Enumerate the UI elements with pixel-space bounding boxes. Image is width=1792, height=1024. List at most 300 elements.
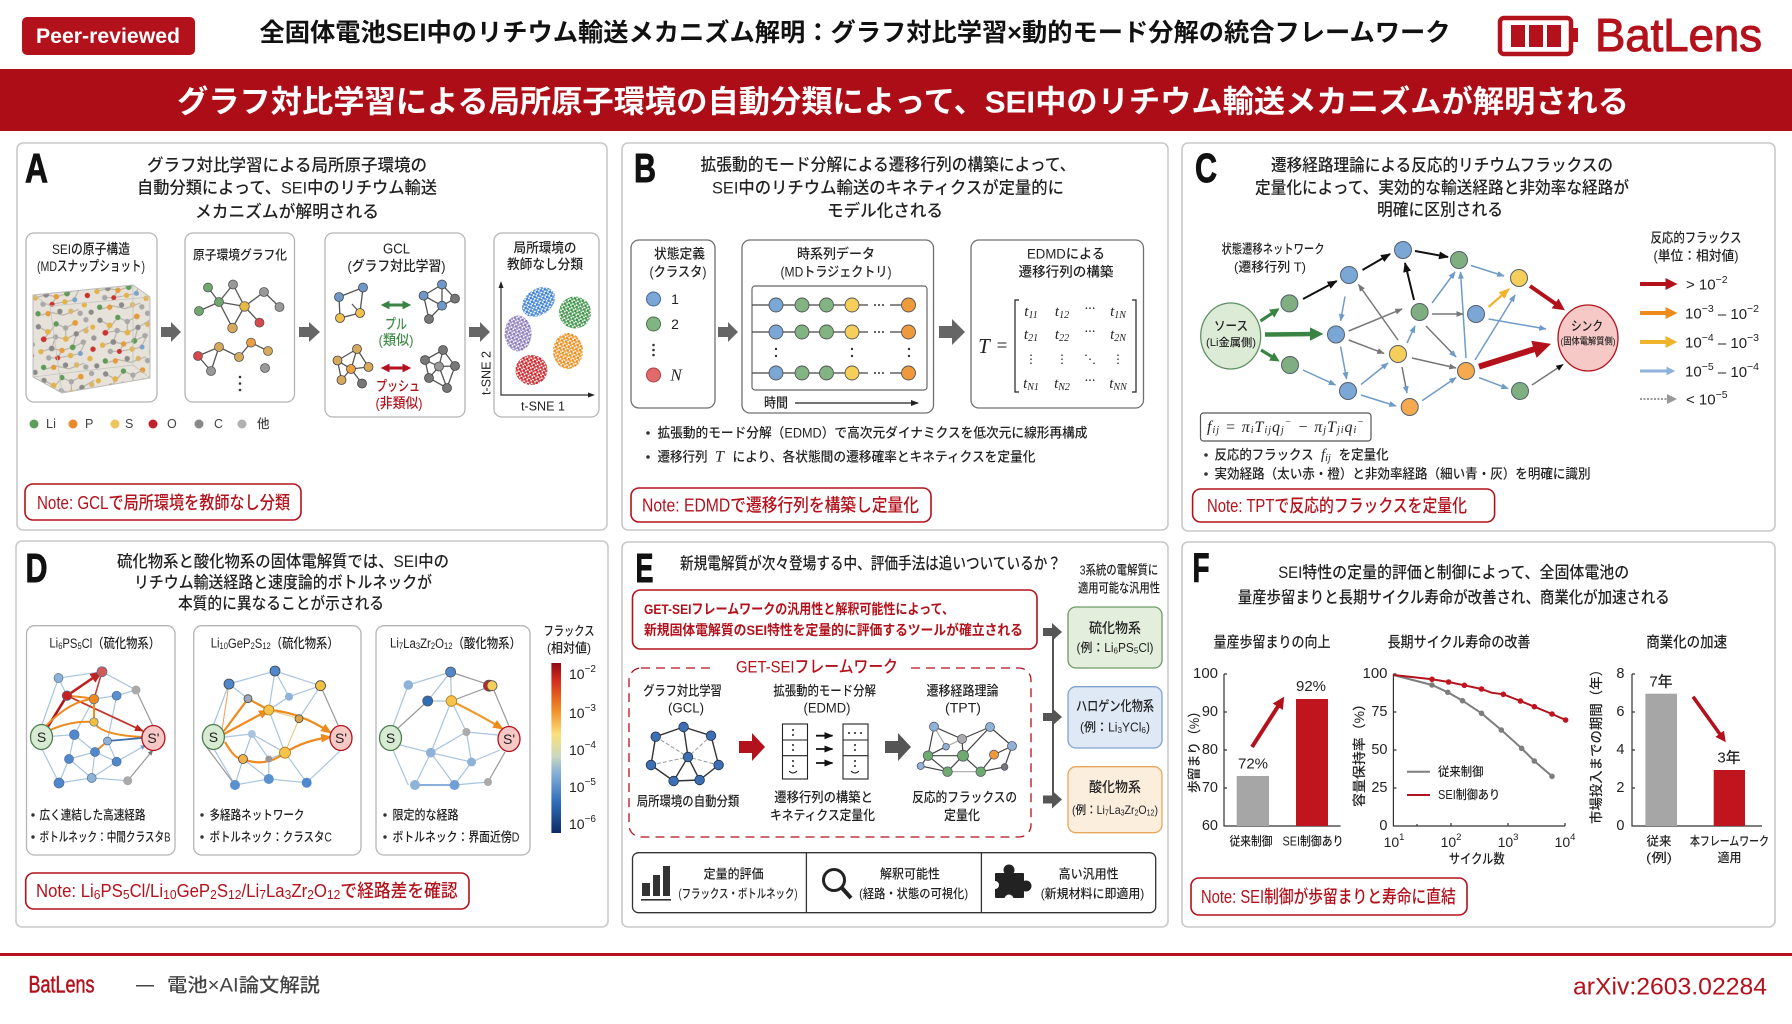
- box: transition matrix: ⋯: [1084, 303, 1096, 315]
- chart: cycle life: 10: [1498, 834, 1513, 850]
- legend: atoms: Li: [46, 417, 56, 431]
- card: Li10GeP2S12: GeP: [228, 636, 251, 650]
- card: Li7La3Zr2O12: Li: [390, 636, 401, 650]
- note B: [631, 488, 931, 522]
- formula: −: [1357, 416, 1364, 428]
- panel E: [622, 542, 1168, 927]
- bullets B: 遷移行列: [658, 448, 708, 464]
- note D: GeP: [177, 881, 210, 901]
- card: sulfide: 硫化物系: [1089, 620, 1141, 636]
- heading B: 拡張動的モード分解による遷移行列の構築によって、: [700, 156, 1076, 174]
- title: 全固体電池SEI中のリチウム輸送メカニズム解明：グラフ対比学習×動的モード分解の統合フレームワーク: [260, 18, 1450, 47]
- step: TPT: 反応的フラックスの: [912, 790, 1017, 805]
- box: time series: 時間: [764, 396, 788, 410]
- footer rule: [0, 953, 1792, 956]
- chart: cycle life: 長期サイクル寿命の改善: [1388, 633, 1530, 651]
- note A: [25, 484, 301, 520]
- legend: flux: [1640, 230, 1759, 408]
- card: Li6PS5Cl: ボトルネック：中間クラスタB: [40, 830, 170, 844]
- legend: flux: 反応的フラックス: [1650, 230, 1742, 246]
- panel F: [1182, 542, 1775, 927]
- chart: commercialization: 3年: [1717, 750, 1741, 766]
- icon: magnifier: [824, 870, 851, 898]
- step: EDMD: キネティクス定量化: [770, 808, 875, 823]
- formula: −: [1285, 416, 1291, 428]
- card: Li7La3Zr2O12: 2: [431, 641, 435, 651]
- badge: Peer-reviewed: Peer-reviewed: [36, 25, 180, 48]
- card: Li6PS5Cl: 6: [58, 641, 62, 651]
- note D: 3: [285, 886, 291, 902]
- formula: − π: [1292, 418, 1323, 436]
- card: Li7La3Zr2O12: Zr: [420, 636, 431, 650]
- legend: flux: 10: [1685, 334, 1702, 352]
- chart: yield: SEI制御あり: [1282, 834, 1344, 849]
- card: Li7La3Zr2O12: 12: [444, 641, 452, 651]
- t-SNE 2 axis label: t-SNE 2: [478, 351, 494, 395]
- chart: commercialization: 7年: [1649, 674, 1673, 690]
- note C: [1193, 489, 1495, 522]
- chart: cycle life: 10: [1441, 834, 1456, 850]
- framework: GET-SEI: GET-SEIフレームワーク: [736, 658, 898, 676]
- legend: flux: −3: [1702, 303, 1714, 315]
- card: Li10GeP2S12: 多経路ネットワーク: [210, 808, 304, 822]
- formula: q: [1272, 418, 1280, 436]
- logo: BatLens: [1500, 9, 1762, 61]
- legend: atoms: C: [214, 417, 223, 431]
- legend: flux: > 10: [1686, 276, 1716, 294]
- panel A: [17, 143, 607, 530]
- connector arrows: [1043, 623, 1062, 808]
- chart: yield: 70: [1202, 780, 1218, 796]
- box: transition matrix: =: [997, 336, 1007, 356]
- card: halide: ): [1146, 721, 1150, 735]
- card: Li10GeP2S12: 2: [251, 641, 255, 651]
- heading D: リチウム輸送経路と速度論的ボトルネックが: [134, 572, 432, 592]
- panel letter E: E: [636, 545, 654, 591]
- heading A: グラフ対比学習による局所原子環境の: [147, 156, 427, 175]
- chart: cycle life: 容量保持率（%）: [1351, 697, 1367, 807]
- chart: commercialization: 本フレームワーク: [1690, 835, 1769, 849]
- box: transition matrix: N2: [1057, 382, 1070, 392]
- heading C: [1255, 156, 1629, 220]
- chart: cycle life: 従来制御: [1438, 764, 1484, 779]
- note D: Note: Li: [36, 881, 98, 901]
- card: Li7La3Zr2O12: [376, 626, 530, 855]
- chart: commercialization: 8: [1616, 666, 1624, 682]
- panel letter B: B: [634, 145, 656, 191]
- card: Li10GeP2S12: [194, 626, 361, 855]
- card: oxide: 2: [1134, 808, 1139, 817]
- box: transition matrix: 2N: [1114, 332, 1127, 344]
- chart: yield: 80: [1202, 742, 1218, 758]
- card: oxide: 酸化物系: [1089, 779, 1141, 795]
- feature: interpretability: (経路・状態の可視化): [859, 886, 968, 901]
- card: sulfide: 5: [1134, 646, 1139, 656]
- chart: yield: 100: [1193, 666, 1218, 682]
- card: sulfide: PS: [1118, 641, 1134, 655]
- card: sulfide: [1068, 607, 1162, 668]
- chart: yield: 72%: [1238, 756, 1268, 772]
- bullets C: 反応的フラックス: [1214, 448, 1314, 462]
- chart: commercialization: 4: [1616, 742, 1624, 758]
- heading A: [137, 156, 437, 222]
- box: state definition: N: [669, 366, 683, 384]
- chart: commercialization: 6: [1616, 704, 1624, 720]
- box: GCL: [325, 233, 465, 417]
- heading D: [117, 552, 449, 613]
- arrow gray: [885, 733, 911, 761]
- bullets C: [1204, 447, 1590, 482]
- box: transition matrix: ⋱: [1084, 352, 1096, 366]
- bullets B: [646, 424, 1088, 466]
- applicability label: [1078, 562, 1160, 596]
- network label: 状態遷移ネットワーク: [1222, 242, 1324, 256]
- colorbar: flux: −6: [585, 814, 596, 824]
- chart: yield: [1187, 634, 1344, 849]
- colorbar: flux: (相対値): [547, 640, 591, 656]
- chart: yield: 90: [1202, 704, 1218, 720]
- arrow: [161, 322, 181, 342]
- heading C: 定量化によって、実効的な輸送経路と非効率な経路が: [1255, 178, 1629, 198]
- card: oxide: O: [1138, 803, 1147, 817]
- box: transition matrix: 12: [1059, 310, 1069, 320]
- arrow: [469, 322, 490, 342]
- note B: Note: EDMDで遷移行列を構築し定量化: [642, 496, 919, 516]
- box: state definition: (クラスタ): [650, 264, 706, 280]
- box: time series: [742, 240, 934, 413]
- feature: quantitative: [678, 866, 798, 901]
- colorbar: flux: フラックス: [544, 624, 594, 638]
- heading D: 本質的に異なることが示される: [178, 593, 384, 613]
- feature: interpretability: 解釈可能性: [880, 866, 940, 882]
- card: Li10GeP2S12: 10: [220, 641, 228, 651]
- box: transition matrix: ⋮: [1025, 352, 1037, 366]
- logo: BatLens: BatLens: [1595, 9, 1762, 61]
- box: atomic structure: [26, 233, 157, 402]
- formula: ji: [1335, 424, 1344, 436]
- note D: /Li: [242, 881, 259, 901]
- card: Li6PS5Cl: [26, 626, 175, 855]
- card: Li7La3Zr2O12: （酸化物系）: [452, 636, 521, 650]
- box: transition matrix: t: [1024, 304, 1028, 320]
- legend: atoms: 他: [257, 417, 270, 431]
- heading E: 新規電解質が次々登場する中、評価手法は追いついているか？: [680, 553, 1061, 573]
- legend: flux: – 10: [1714, 364, 1747, 380]
- legend: flux: – 10: [1714, 334, 1747, 352]
- colorbar: flux: 10: [569, 779, 585, 795]
- legend: flux: −2: [1747, 303, 1759, 315]
- card: Li7La3Zr2O12: O: [435, 636, 444, 650]
- box: transition matrix: t: [1110, 327, 1114, 343]
- bullets C: を定量化: [1339, 448, 1389, 462]
- legend: flux: 10: [1685, 364, 1702, 380]
- footer brand: BatLens: [28, 972, 94, 998]
- note D: Zr: [291, 881, 307, 901]
- note D: La: [266, 881, 286, 901]
- colorbar: flux: −4: [585, 740, 596, 750]
- badge: Peer-reviewed: [22, 17, 195, 55]
- card: oxide: ): [1154, 803, 1158, 817]
- step: EDMD: [770, 682, 876, 823]
- formula: T: [1327, 418, 1337, 436]
- colorbar: flux: 10: [569, 705, 585, 721]
- legend: flux: – 10: [1714, 306, 1747, 322]
- colorbar: flux: 10: [569, 666, 585, 682]
- note D: で経路差を確認: [340, 881, 458, 901]
- box: time series: 時系列データ: [797, 246, 875, 262]
- note F: Note: SEI制御が歩留まりと寿命に直結: [1201, 886, 1456, 907]
- feature: quantitative: 定量的評価: [704, 866, 764, 882]
- card: halide: (例：Li: [1080, 721, 1119, 735]
- panel letter A: A: [25, 145, 48, 191]
- card: sulfide: (例：Li: [1076, 641, 1115, 655]
- legend: atoms: P: [85, 417, 93, 431]
- chart: commercialization: 2: [1616, 780, 1624, 796]
- box: GCL: プル: [385, 316, 407, 332]
- card: halide: YCl: [1122, 721, 1141, 735]
- legend: atoms: [30, 417, 270, 431]
- box: transition matrix: N1: [1026, 382, 1039, 392]
- heading A: 自動分類によって、SEI中のリチウム輸送: [137, 178, 437, 198]
- icon: puzzle: [991, 864, 1032, 904]
- formula: f: [1207, 418, 1211, 436]
- footer brand: 電池×AI論文解説: [167, 974, 320, 996]
- note D: 10: [163, 886, 177, 902]
- feature: interpretability: [859, 866, 968, 901]
- panel letter D: D: [26, 545, 48, 591]
- card: Li7La3Zr2O12: 限定的な経路: [392, 808, 458, 822]
- feature: quantitative: (フラックス・ボトルネック): [678, 887, 798, 901]
- note D: PS: [100, 881, 123, 901]
- chart: cycle life: 4: [1570, 832, 1575, 842]
- legend: flux: −5: [1702, 361, 1714, 373]
- box: transition matrix: T: [978, 334, 991, 358]
- bullets C: f: [1321, 447, 1325, 463]
- chart: commercialization: 0: [1616, 818, 1624, 834]
- step: GCL: 局所環境の自動分類: [637, 794, 740, 809]
- box: transition matrix: t: [1110, 304, 1114, 320]
- note D: 6: [94, 886, 100, 902]
- box: transition matrix: NN: [1112, 382, 1128, 392]
- colorbar: flux: 10: [569, 742, 585, 758]
- panel B: [622, 143, 1168, 530]
- chart: yield: 60: [1202, 818, 1218, 834]
- box: transition matrix: [971, 240, 1144, 408]
- box: t-SNE clusters: [494, 233, 599, 417]
- panel letter F: F: [1192, 545, 1210, 591]
- heading F: [1238, 563, 1670, 607]
- chart: cycle life: 25: [1371, 780, 1388, 796]
- card: oxide: (例：Li: [1072, 803, 1109, 817]
- legend: flux: 10: [1685, 306, 1702, 322]
- box: state definition: 状態定義: [654, 246, 705, 262]
- bullets C: ij: [1325, 452, 1331, 464]
- heading B: モデル化される: [827, 200, 943, 220]
- panel D: [16, 541, 608, 927]
- colorbar: flux: [544, 624, 596, 833]
- chart: cycle life: 100: [1362, 666, 1388, 682]
- legend: flux: −2: [1716, 274, 1728, 286]
- step: EDMD: 拡張動的モード分解: [773, 682, 876, 698]
- applicability label: 3系統の電解質に: [1080, 562, 1158, 578]
- legend: flux: (単位：相対値): [1654, 248, 1738, 264]
- legend: flux: < 10: [1686, 392, 1716, 408]
- card: halide: ハロゲン化物系: [1076, 698, 1154, 714]
- note F: [1191, 878, 1467, 915]
- step: TPT: [912, 682, 1017, 823]
- card: Li10GeP2S12: S: [209, 729, 218, 745]
- heading C: 遷移経路理論による反応的リチウムフラックスの: [1271, 156, 1613, 175]
- note D: S: [217, 881, 228, 901]
- card: sulfide: Cl): [1138, 641, 1154, 655]
- box: transition matrix: 1N: [1114, 310, 1127, 320]
- card: oxide: Zr: [1125, 803, 1134, 817]
- chart: yield: 量産歩留まりの向上: [1214, 634, 1330, 651]
- card: Li10GeP2S12: S: [255, 636, 262, 650]
- chart: commercialization: 商業化の加速: [1646, 634, 1727, 651]
- arrow red: [739, 733, 765, 761]
- card: Li10GeP2S12: S': [335, 730, 347, 746]
- chart: cycle life: 10: [1555, 834, 1570, 850]
- banner: main message: グラフ対比学習による局所原子環境の自動分類によって、SEI中のリチウム輸送メカニズムが解明される: [177, 84, 1629, 120]
- panel C: [1182, 143, 1775, 531]
- box: GCL: (非類似): [376, 395, 422, 411]
- note D: O: [314, 881, 327, 901]
- heading F: SEI特性の定量的評価と制御によって、全固体電池の: [1278, 563, 1629, 582]
- legend: flux: −4: [1747, 361, 1759, 373]
- chart: cycle life: 75: [1371, 704, 1388, 720]
- box: time series: (MDトラジェクトリ): [780, 264, 892, 280]
- box: transition matrix: ⋮: [1056, 352, 1068, 366]
- network: reactive flux: シンク: [1571, 318, 1603, 334]
- bullets C: 実効経路（太い赤・橙）と非効率経路（細い青・灰）を明確に識別: [1214, 466, 1590, 482]
- box: graph: 原子環境グラフ化: [193, 248, 287, 262]
- legend: atoms: O: [167, 417, 177, 431]
- step: GCL: グラフ対比学習: [643, 682, 722, 698]
- card: Li10GeP2S12: Li: [211, 636, 221, 650]
- formula: j: [1321, 424, 1326, 436]
- chart: cycle life: 0: [1379, 818, 1388, 834]
- card: Li10GeP2S12: （硫化物系）: [271, 636, 339, 650]
- box: GCL: (グラフ対比学習): [348, 258, 446, 274]
- card: oxide: La: [1109, 803, 1121, 817]
- chart: cycle life: 50: [1371, 742, 1388, 758]
- chart: commercialization: 市場投入までの期間（年）: [1588, 663, 1604, 824]
- card: Li7La3Zr2O12: 3: [416, 641, 420, 651]
- note C: Note: TPTで反応的フラックスを定量化: [1207, 496, 1467, 516]
- network: reactive flux: (固体電解質側): [1560, 336, 1616, 348]
- card: oxide: 3: [1121, 808, 1125, 817]
- chart: cycle life: サイクル数: [1449, 852, 1505, 866]
- box: atomic structure: (MDスナップショット): [37, 258, 145, 274]
- chart: cycle life: 10: [1384, 834, 1399, 850]
- applicability label: 適用可能な汎用性: [1078, 580, 1160, 596]
- box: state definition: 2: [671, 316, 679, 332]
- box: transition matrix: 遷移行列の構築: [1018, 264, 1114, 280]
- heading B: [700, 156, 1076, 220]
- heading A: メカニズムが解明される: [195, 202, 379, 222]
- box: transition matrix: 22: [1059, 332, 1069, 344]
- chart: commercialization: [1588, 634, 1769, 865]
- box: transition matrix: 11: [1028, 310, 1038, 320]
- step: TPT: 定量化: [944, 808, 980, 823]
- formula: q: [1344, 418, 1352, 436]
- box: t-SNE clusters: 教師なし分類: [507, 257, 583, 272]
- card: Li10GeP2S12: ボトルネック：クラスタC: [210, 830, 332, 844]
- box: graph: [185, 233, 294, 402]
- card: Li7La3Zr2O12: S: [386, 730, 395, 746]
- arrow: [299, 322, 320, 342]
- feature: versatility: [1041, 866, 1144, 901]
- network: reactive flux: ソース: [1214, 318, 1248, 334]
- panel letter C: C: [1195, 145, 1217, 191]
- formula: = π: [1220, 418, 1251, 436]
- callout: GET-SEI: [632, 590, 1037, 649]
- card: Li10GeP2S12: 12: [262, 641, 271, 651]
- card: Li6PS5Cl: Li: [49, 636, 60, 650]
- card: Li6PS5Cl: 5: [77, 641, 82, 651]
- note D: [26, 873, 469, 909]
- callout: GET-SEI: GET-SEIフレームワークの汎用性と解釈可能性によって、: [644, 601, 954, 617]
- box: GCL: (類似): [378, 332, 414, 348]
- box: transition matrix: t: [1109, 376, 1113, 392]
- feature bar: [632, 853, 1156, 913]
- formula: i: [1251, 424, 1254, 436]
- arXiv id: arXiv:2603.02284: [1573, 974, 1767, 1000]
- card: oxide: 12: [1147, 808, 1155, 817]
- card: Li7La3Zr2O12: 7: [399, 641, 403, 651]
- footer brand: [28, 972, 320, 998]
- card: halide: [1068, 687, 1162, 748]
- chart: cycle life: 2: [1456, 832, 1461, 842]
- card: oxide: [1068, 767, 1162, 833]
- note D: 7: [259, 886, 266, 902]
- chart: cycle life: SEI制御あり: [1438, 787, 1500, 802]
- heading B: SEI中のリチウム輸送のキネティクスが定量的に: [712, 178, 1064, 198]
- note D: Cl/Li: [130, 881, 163, 901]
- formula: i: [1353, 424, 1356, 436]
- colorbar: flux: −3: [585, 702, 596, 714]
- card: oxide: 7: [1105, 808, 1109, 817]
- chart: commercialization: 適用: [1718, 850, 1742, 865]
- note D: 12: [327, 886, 340, 902]
- bullets B: T: [715, 448, 725, 466]
- card: Li6PS5Cl: 広く連結した高速経路: [40, 808, 146, 822]
- chart: cycle life: [1351, 633, 1575, 866]
- box: transition matrix: t: [1055, 327, 1059, 343]
- formula: j: [1279, 424, 1284, 436]
- chart: cycle life: 3: [1513, 832, 1518, 842]
- card: Li6PS5Cl: PS: [62, 636, 77, 650]
- formula: ij: [1212, 424, 1219, 436]
- banner: main message: [0, 69, 1792, 131]
- network: reactive flux: [1201, 242, 1618, 416]
- box: GCL: プッシュ: [376, 378, 420, 394]
- bullets B: により、各状態間の遷移確率とキネティクスを定量化: [732, 448, 1036, 464]
- feature: versatility: (新規材料に即適用): [1041, 886, 1144, 901]
- card: Li7La3Zr2O12: ボトルネック：界面近傍D: [392, 830, 520, 844]
- step: EDMD: 遷移行列の構築と: [774, 789, 873, 805]
- heading C: 明確に区別される: [1377, 200, 1503, 220]
- network label: [1222, 242, 1324, 274]
- box: GCL: GCL: [383, 240, 410, 258]
- box: state definition: [631, 240, 715, 408]
- box: state definition: 1: [671, 291, 679, 307]
- note D: 2: [307, 886, 314, 902]
- note A: Note: GCLで局所環境を教師なし分類: [37, 493, 290, 513]
- step: TPT: 遷移経路理論: [926, 682, 999, 698]
- legend: flux: −5: [1716, 389, 1728, 401]
